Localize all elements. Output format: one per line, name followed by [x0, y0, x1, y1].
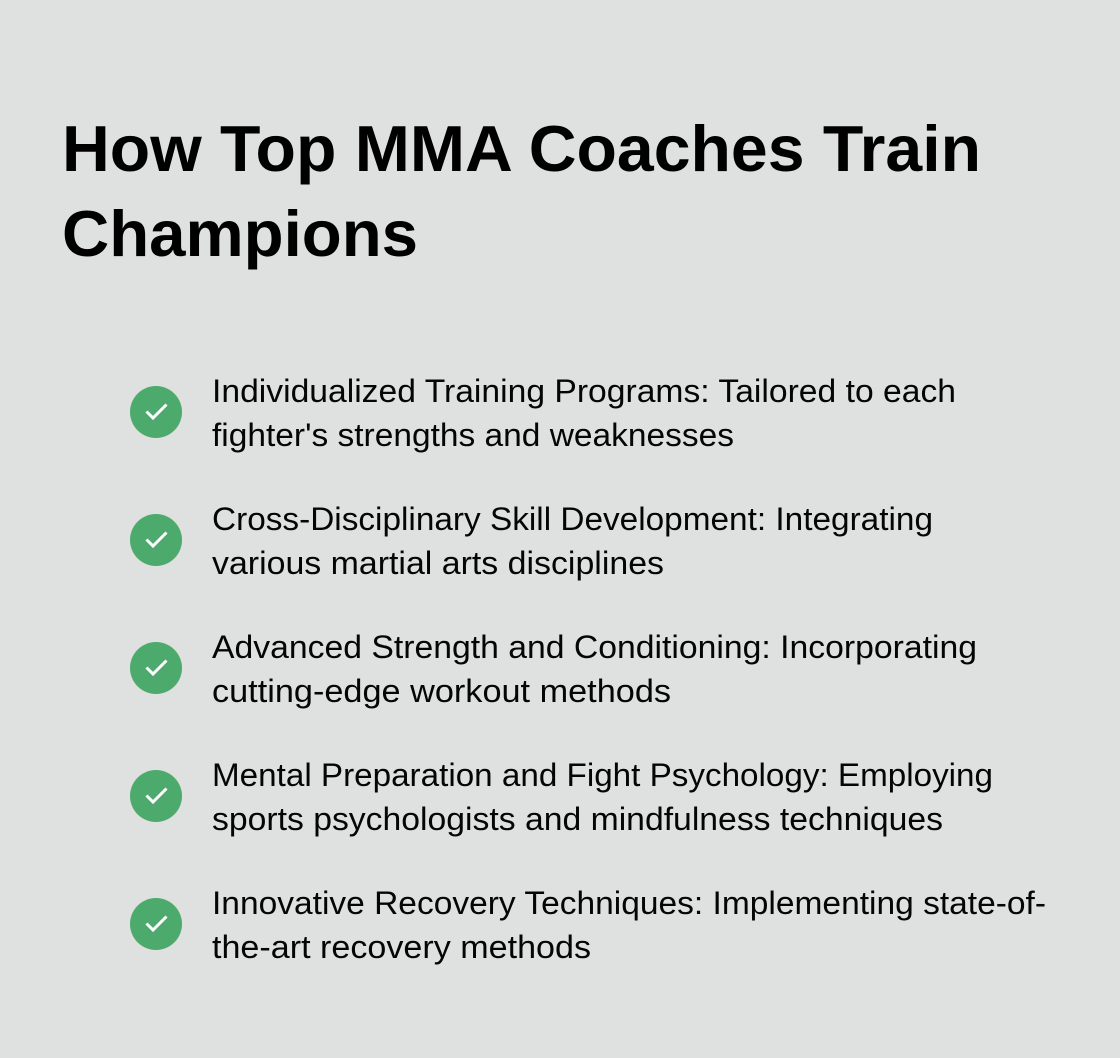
text: strength and conditioning — [212, 629, 977, 709]
list item: mental preparation — [130, 757, 993, 837]
title: Champions — [62, 197, 418, 270]
title: How Top MMA Coaches Train — [62, 112, 981, 185]
list item: strength and conditioning — [130, 629, 977, 709]
text: mental preparation: Mental Preparation and Fight Psychology: Employing — [212, 757, 993, 793]
icon: check mark — [130, 898, 182, 950]
text: cross-disciplinary: various martial arts disciplines — [212, 545, 664, 581]
list item: individualized training — [130, 373, 956, 453]
list item: cross-disciplinary — [130, 501, 933, 581]
text: recovery techniques — [212, 885, 1046, 965]
text: strength and conditioning: Advanced Strength and Conditioning: Incorporating — [212, 629, 977, 665]
icon: check mark — [130, 642, 182, 694]
text: individualized training — [212, 373, 956, 453]
text: individualized training: fighter's strengths and weaknesses — [212, 417, 734, 453]
text: mental preparation: sports psychologists and mindfulness techniques — [212, 801, 943, 837]
text: recovery techniques: Innovative Recovery Techniques: Implementing state-of- — [212, 885, 1046, 921]
icon: check mark — [130, 514, 182, 566]
title — [62, 112, 981, 270]
text: cross-disciplinary — [212, 501, 933, 581]
text: individualized training: Individualized Training Programs: Tailored to each — [212, 373, 956, 409]
list item: recovery techniques — [130, 885, 1046, 965]
text: strength and conditioning: cutting-edge workout methods — [212, 673, 671, 709]
icon: check mark — [130, 386, 182, 438]
checklist — [130, 373, 1046, 965]
text: mental preparation — [212, 757, 993, 837]
text: cross-disciplinary: Cross-Disciplinary Skill Development: Integrating — [212, 501, 933, 537]
text: recovery techniques: the-art recovery methods — [212, 929, 591, 965]
icon: check mark — [130, 770, 182, 822]
